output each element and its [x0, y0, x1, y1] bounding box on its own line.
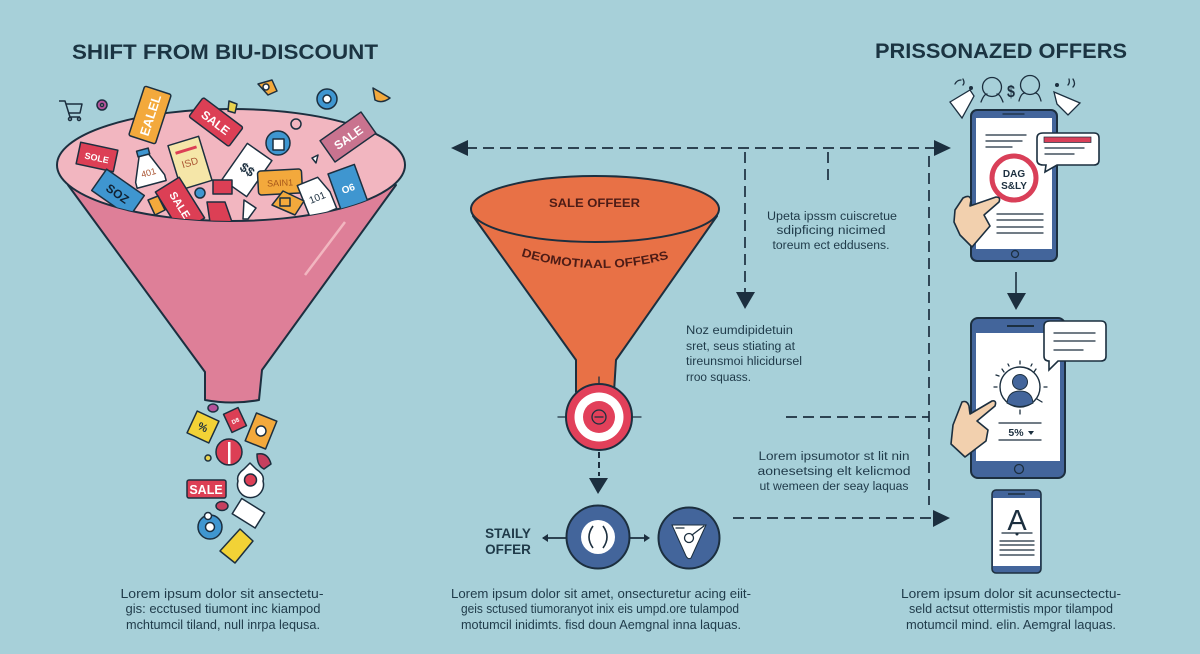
- bottle: [134, 147, 167, 189]
- text block: bottom right: [901, 587, 1121, 632]
- text block: middle side note: [686, 325, 802, 384]
- ticket: pink sale: [320, 112, 376, 162]
- hand pointing: [951, 401, 996, 457]
- ticket: orange small: [257, 169, 303, 195]
- ticket: blue sale: SOZ: [103, 181, 132, 207]
- label: staily offer: STAILY: [485, 526, 531, 541]
- ticket: red sale: SALE: [198, 108, 232, 138]
- text block: lower side note: ut wemeen der seay laquas: [760, 481, 909, 493]
- speech bubble: [1037, 133, 1099, 172]
- text block: bottom right: Lorem ipsum dolor sit acunsectectu-: [901, 587, 1121, 601]
- magnifier badge: DAG: [1003, 169, 1025, 180]
- icon: blue circle one with arrows: [542, 506, 650, 568]
- ticket: white: [222, 143, 272, 197]
- text block: bottom center: motumcil inidimts. fisd doun Aemgnal inna laquas.: [461, 618, 741, 632]
- text block: bottom left: [120, 587, 324, 632]
- avatar with rays: [994, 361, 1047, 414]
- text block: bottom center: [451, 587, 751, 632]
- text block: lower side note: Lorem ipsumotor st lit nin: [758, 451, 910, 463]
- bottle: 401: [140, 166, 157, 180]
- ticket: white 2: [297, 175, 337, 219]
- text block: upper side note: [767, 211, 897, 252]
- text block: upper side note: toreum ect eddusens.: [772, 240, 890, 252]
- ticket: blue: O6: [340, 182, 357, 197]
- ticket: orange small: SAIN1: [267, 177, 293, 189]
- ticket: cream: ISD: [181, 156, 200, 171]
- phone one: [954, 110, 1099, 261]
- discount tickets in funnel: [59, 80, 390, 233]
- text block: middle side note: sret, seus stiating at: [686, 341, 796, 353]
- ticket: orange: [129, 86, 171, 144]
- text block: bottom left: gis: ecctused tiumont inc kiampod: [126, 602, 321, 616]
- icon: blue circle two: [658, 508, 720, 568]
- ticket: red sale 3: SALE: [166, 190, 192, 221]
- text block: middle side note: tireunsmoi hlicidursel: [686, 356, 802, 368]
- connector arrows: [451, 140, 1026, 527]
- ticket: red sale 3: [154, 176, 206, 220]
- label: staily offer: [485, 526, 531, 557]
- ticket: cream: [168, 136, 212, 190]
- ticket: pink sale: SALE: [331, 123, 366, 153]
- icon: people and tags above phone: [950, 76, 1080, 118]
- ticket: red sale 2: [76, 142, 118, 172]
- label: staily offer: OFFER: [485, 542, 531, 557]
- orange funnel: [471, 176, 719, 392]
- magnifier badge: [992, 156, 1036, 200]
- phone three: A: [1007, 505, 1027, 537]
- funnel label: promotional offers: DEOMOTIAAL OFFERS: [522, 248, 668, 268]
- funnel label: sale offer: SALE OFFEER: [549, 196, 640, 210]
- falling tickets below funnel: D8: [231, 417, 241, 426]
- text block: bottom right: seld actsut ottermistis mpor tilampod: [909, 602, 1113, 616]
- text block: upper side note: Upeta ipssm cuiscretue: [767, 211, 897, 223]
- text block: lower side note: aonesetsing elt kelicmod: [758, 466, 910, 478]
- icon: target: [558, 377, 641, 450]
- phone two: [951, 318, 1106, 478]
- text block: upper side note: sdipficing nicimed: [776, 225, 886, 237]
- title: left heading: SHIFT FROM BIU-DISCOUNT: [72, 41, 378, 64]
- falling tickets below funnel: %: [196, 420, 210, 436]
- falling tickets below funnel: SALE: [189, 483, 223, 497]
- text block: bottom left: mchtumcil tiland, null inrpa lequsa.: [126, 618, 320, 632]
- ticket: red sale 2: SOLE: [84, 151, 110, 165]
- ticket: blue sale: [92, 169, 144, 217]
- magnifier badge: S&LY: [1001, 181, 1027, 192]
- falling tickets below funnel: [187, 404, 277, 563]
- title: right heading: PRISSONAZED OFFERS: [875, 40, 1127, 63]
- text block: bottom center: Lorem ipsum dolor sit amet, onsecturetur acing eiit-: [451, 587, 751, 601]
- dashed arrow down from target: [589, 452, 608, 494]
- text block: middle side note: Noz eumdipidetuin: [686, 325, 793, 337]
- text block: lower side note: [758, 451, 910, 493]
- ticket: white: $$: [237, 159, 258, 180]
- icon: shopping cart: [59, 101, 82, 120]
- text block: bottom center: geis sctused tiumoranyot inix eis umpd.ore tulampod: [461, 602, 739, 616]
- text block: middle side note: rroo squass.: [686, 372, 751, 384]
- phone two: 5%: [1008, 427, 1024, 439]
- phone three: [992, 490, 1041, 573]
- hand pointing: [954, 196, 1000, 247]
- ticket: red sale: [189, 97, 243, 147]
- ticket: orange: EALEL: [137, 93, 164, 138]
- ticket: white 2: 101: [308, 190, 328, 207]
- text block: bottom left: Lorem ipsum dolor sit ansectetu-: [120, 587, 324, 601]
- speech bubble: [1044, 321, 1106, 370]
- pink funnel: [57, 109, 405, 402]
- ticket: blue: [328, 164, 368, 212]
- icon: people and tags above phone: $: [1007, 82, 1015, 101]
- text block: bottom right: motumcil mind. elin. Aemgral laquas.: [906, 618, 1116, 632]
